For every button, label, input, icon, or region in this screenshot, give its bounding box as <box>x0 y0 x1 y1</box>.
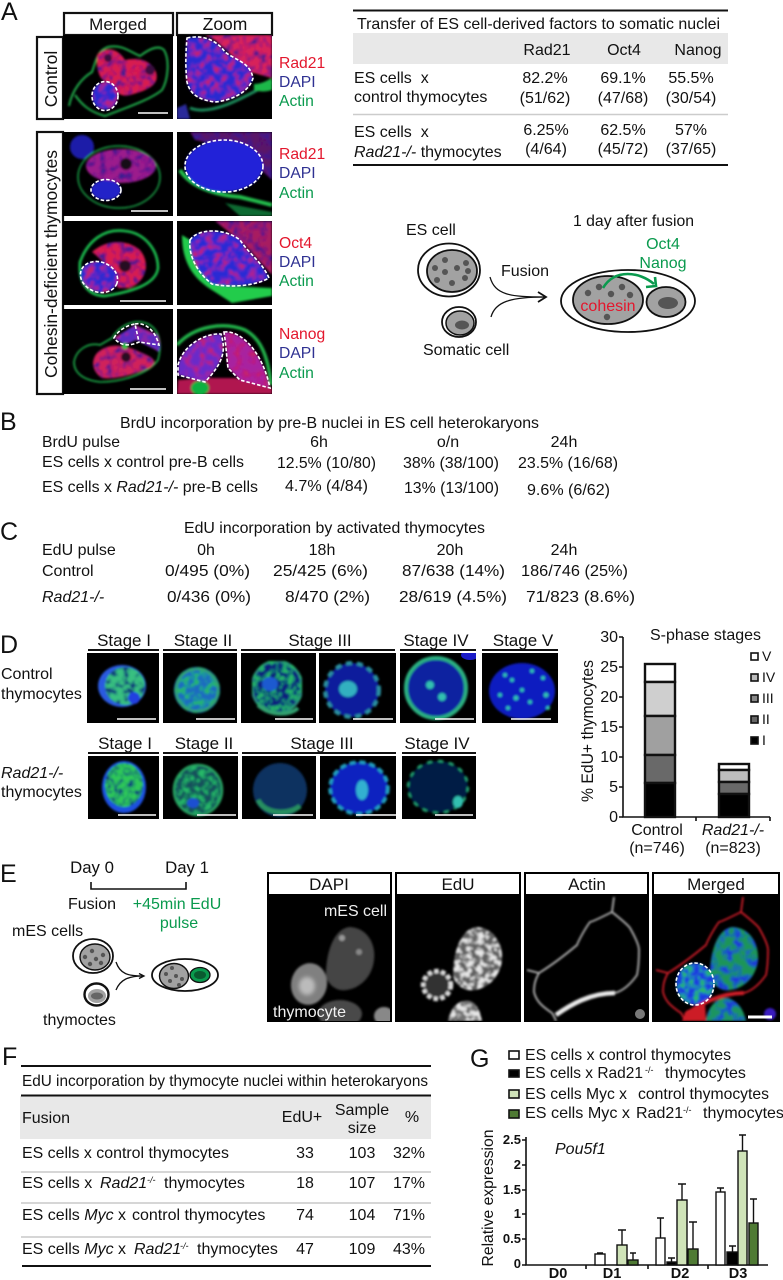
label: Oct4 Nanog <box>639 236 687 272</box>
x tick labels <box>549 1266 747 1280</box>
table row: control thymocytes: (30/54) <box>666 90 716 107</box>
legend: Rad21 DAPI Actin (deficient): Rad21 <box>279 146 325 163</box>
micrograph: Nanog zoom <box>177 309 272 394</box>
row: control: 186/746 (25%) <box>521 563 628 580</box>
legend: Nanog DAPI Actin: Nanog <box>279 326 325 343</box>
legend text: ES cells x control thymocytes <box>525 1047 731 1064</box>
row 3 <box>22 1207 425 1224</box>
panel A: fusion schematic <box>406 213 695 359</box>
header row: EdU+ <box>282 1109 322 1126</box>
micrograph: Rad21 stage II <box>163 756 238 819</box>
row: control <box>42 563 628 580</box>
label: ES cell: ES cell <box>406 222 456 239</box>
micrograph: Rad21 stage III a <box>242 756 316 819</box>
stage headers control: Stage I <box>97 631 151 650</box>
table row: Rad21 thymocytes: (45/72) <box>598 141 648 158</box>
chart title: S-phase stages <box>650 627 761 644</box>
table rules and header band <box>353 10 728 165</box>
row label: Cohesin-deficient thymocytes: Cohesin-deficient thymocytes <box>41 150 61 378</box>
stage legend: II <box>762 711 770 727</box>
row: control pre-B: 23.5% (16/68) <box>518 455 618 472</box>
column header: Merged: Merged <box>89 15 147 34</box>
header row <box>42 434 577 451</box>
table row: control thymocytes: control thymocytes <box>354 89 487 106</box>
panel letter G: G <box>470 1045 489 1073</box>
table header row: Nanog <box>674 42 722 59</box>
header row: Sample <box>335 1102 389 1119</box>
header row <box>42 542 577 559</box>
row: Rad21 pre-B: 9.6% (6/62) <box>527 482 610 499</box>
legend text: ES cells x Rad21 <box>525 1065 643 1082</box>
row: Rad21 pre-B: ES cells x Rad21-/- pre-B cells <box>42 479 258 496</box>
row label: control thymocytes <box>1 666 82 703</box>
stage legend: V <box>762 648 772 664</box>
header row: 24h <box>551 542 577 559</box>
row: control: 0/495 (0%) <box>165 563 250 580</box>
table rules and band <box>20 1066 431 1266</box>
gene label: Pou5f1 <box>555 1141 606 1158</box>
legend text: Rad21 <box>636 1105 683 1122</box>
micrograph: Actin: Actin <box>568 875 606 894</box>
legend text: ES cells Myc x <box>525 1105 630 1122</box>
y tick labels: 5 <box>609 779 618 796</box>
legend: Oct4 DAPI Actin: Oct4 <box>279 235 312 252</box>
row: control: 87/638 (14%) <box>402 563 505 580</box>
y tick labels: 0 <box>514 1256 521 1271</box>
micrograph: control stage II <box>163 653 237 723</box>
legend: Oct4 DAPI Actin: DAPI <box>279 254 316 271</box>
table row: Rad21 thymocytes: (37/65) <box>666 141 716 158</box>
legend: Rad21 DAPI Actin (control): Actin <box>279 93 314 110</box>
micrograph: Oct4 zoom <box>177 221 272 305</box>
row 3: ES cells Myc x <box>22 1207 126 1224</box>
table row: control thymocytes: (47/68) <box>598 90 648 107</box>
row 1: 33 <box>296 1145 314 1162</box>
legend text: -/- <box>645 1065 654 1075</box>
y tick labels: 10 <box>600 749 618 766</box>
header row: EdU pulse <box>42 542 116 559</box>
timeline: +45min EdU <box>133 896 221 913</box>
legend text: -/- <box>683 1105 692 1115</box>
bar category labels: Control <box>631 822 683 839</box>
bar category labels: (n=746) <box>629 840 685 857</box>
row label: Control <box>37 37 63 119</box>
stage headers control: Stage II <box>174 631 232 650</box>
header row: o/n <box>437 434 459 451</box>
row 1: 32% <box>393 1145 425 1162</box>
table row: Rad21 thymocytes <box>354 122 716 161</box>
label: thymoctes: thymoctes <box>43 1012 116 1029</box>
row 2: thymocytes <box>164 1175 245 1192</box>
legend text: thymocytes <box>703 1105 783 1122</box>
row 4: Rad21 <box>134 1241 181 1258</box>
label: Oct4 Nanog: Nanog <box>639 255 687 272</box>
table row: control thymocytes: (51/62) <box>520 90 570 107</box>
row label: control thymocytes: Control <box>1 666 53 683</box>
stage headers Rad21 <box>88 734 476 753</box>
axes <box>619 637 770 821</box>
table header row: Rad21 <box>523 42 571 59</box>
header row: BrdU pulse <box>42 434 120 451</box>
row 2 <box>22 1175 425 1192</box>
panel letter B: B <box>0 408 17 436</box>
panel letter F: F <box>2 1043 17 1071</box>
micrograph: control stage I <box>87 653 159 723</box>
row label: Rad21 thymocytes <box>1 765 82 801</box>
y tick labels <box>600 629 618 826</box>
y axis label: % EdU+ thymocytes <box>579 660 597 802</box>
table title: BrdU incorporation by pre-B nuclei in ES cell heterokaryons <box>120 415 539 432</box>
y tick labels: 1.5 <box>503 1182 521 1197</box>
legend: Rad21 DAPI Actin (control): Rad21 <box>279 55 325 72</box>
legend: Rad21 DAPI Actin (control) <box>279 55 325 110</box>
icon: mES cell <box>73 939 113 973</box>
row 3: 71% <box>393 1207 425 1224</box>
row label: Rad21 thymocytes: Rad21-/- <box>1 765 63 782</box>
header row: 0h <box>197 542 215 559</box>
arrow: green factor transfer <box>603 274 656 288</box>
stage headers Rad21: Stage III <box>290 734 354 753</box>
label: cohesin: cohesin <box>580 298 636 315</box>
micrograph: control stage V <box>482 653 558 723</box>
y tick labels: 15 <box>600 719 618 736</box>
icon: thymocyte <box>84 984 108 1006</box>
row: Rad21: 0/436 (0%) <box>167 589 251 606</box>
row label: Control: Control <box>41 51 61 107</box>
stage legend <box>751 648 776 748</box>
timeline: Day 1 <box>165 858 209 877</box>
table row: Rad21 thymocytes: Rad21-/- thymocytes <box>354 144 502 161</box>
micrograph: control stage III a <box>241 653 316 723</box>
label: mES cells: mES cells <box>12 923 83 940</box>
row: control pre-B: 12.5% (10/80) <box>277 455 376 472</box>
stage legend: III <box>762 690 774 706</box>
table title: Transfer of ES cell-derived factors to somatic nuclei <box>357 16 720 33</box>
micrograph: DAPI: thymocyte <box>273 1004 346 1021</box>
row 2: -/- <box>147 1175 156 1185</box>
bars <box>595 1151 758 1265</box>
micrograph: Actin <box>524 872 649 1022</box>
micrograph: Oct4 merged <box>63 221 173 305</box>
legend <box>509 1051 519 1118</box>
row: Rad21 pre-B: 13% (13/100) <box>404 480 499 497</box>
row: control: 25/425 (6%) <box>273 563 368 580</box>
micrograph: Nanog merged <box>63 309 173 394</box>
legend: Rad21 DAPI Actin (control): DAPI <box>279 74 316 91</box>
timeline: Day 0 <box>70 858 114 877</box>
label: Fusion: Fusion <box>501 263 549 280</box>
panel A: transfer table <box>353 10 728 165</box>
micrograph: Rad21 stage I <box>88 756 159 819</box>
stage headers control: Stage V <box>493 631 554 650</box>
legend: Rad21 DAPI Actin (deficient): DAPI <box>279 165 316 182</box>
timeline: Fusion <box>68 896 116 913</box>
column header: Zoom <box>177 13 272 35</box>
table row: control thymocytes <box>354 70 716 107</box>
row 4: 47 <box>296 1241 314 1258</box>
legend text: ES cells Myc x <box>525 1086 627 1103</box>
header row <box>22 1102 419 1137</box>
row 1 <box>22 1145 425 1162</box>
legend text: control thymocytes <box>638 1086 769 1103</box>
table row: control thymocytes: 69.1% <box>600 70 646 87</box>
row 4: thymocytes <box>197 1241 278 1258</box>
row 1: ES cells x control thymocytes <box>22 1145 229 1162</box>
row label: Rad21 thymocytes: thymocytes <box>1 784 82 801</box>
row: Rad21: 28/619 (4.5%) <box>399 589 507 606</box>
row 4: 109 <box>349 1241 375 1258</box>
table row: Rad21 thymocytes: 62.5% <box>600 122 646 139</box>
row: control: Control <box>42 563 94 580</box>
row: Rad21 pre-B <box>42 478 610 499</box>
table row: Rad21 thymocytes: ES cells x <box>354 124 429 141</box>
row: Rad21 <box>42 589 635 606</box>
micrograph: Merged <box>652 872 780 1022</box>
row: Rad21: 71/823 (8.6%) <box>526 589 635 606</box>
micrograph: EdU: EdU <box>441 875 475 894</box>
stage legend: IV <box>762 669 776 685</box>
y tick labels: 0 <box>609 809 618 826</box>
panel E: micrographs <box>267 872 780 1028</box>
legend text <box>525 1047 783 1122</box>
y tick labels: 0.5 <box>503 1231 521 1246</box>
stage legend: I <box>762 732 766 748</box>
micrograph: Rad21 zoom <box>177 132 272 216</box>
header row: 6h <box>310 434 328 451</box>
panel letter E: E <box>0 860 17 888</box>
y axis label: Relative expression <box>480 1130 497 1266</box>
stage headers Rad21: Stage II <box>175 734 233 753</box>
header row: % <box>405 1109 419 1126</box>
table row: Rad21 thymocytes: (4/64) <box>525 141 567 158</box>
table title: EdU incorporation by activated thymocytes <box>184 520 485 537</box>
row label: control thymocytes: thymocytes <box>1 686 82 703</box>
y tick labels: 2.5 <box>503 1132 521 1147</box>
panel C: EdU table <box>0 518 635 606</box>
arrow: fusion <box>490 277 546 317</box>
icon: heterokaryon <box>561 270 695 332</box>
row: control pre-B: 38% (38/100) <box>403 455 499 472</box>
header row: size <box>348 1120 376 1137</box>
y tick labels: 1 <box>514 1206 521 1221</box>
legend: Nanog DAPI Actin <box>279 326 325 382</box>
table header row <box>523 42 722 59</box>
micrograph: control merged <box>63 35 173 119</box>
header row: 18h <box>309 542 335 559</box>
bar category labels: (n=823) <box>705 840 761 857</box>
y tick labels: 2 <box>514 1157 521 1172</box>
header row: Fusion <box>22 1110 70 1127</box>
legend: Nanog DAPI Actin: DAPI <box>279 345 316 362</box>
stage headers Rad21: Stage IV <box>404 734 470 753</box>
header row: 24h <box>551 434 577 451</box>
row: Rad21: 8/470 (2%) <box>285 589 370 606</box>
stage headers control: Stage III <box>288 631 352 650</box>
legend text: thymocytes <box>665 1065 746 1082</box>
error bars <box>597 1135 757 1262</box>
stain legend rows <box>279 55 325 382</box>
micrograph: Merged: Merged <box>687 875 745 894</box>
row: Rad21: Rad21-/- <box>42 589 104 606</box>
panel G: expression chart <box>470 1045 783 1280</box>
axes <box>522 1137 768 1269</box>
legend: Rad21 DAPI Actin (deficient) <box>279 146 325 202</box>
bar: Rad21 <box>719 764 749 817</box>
bar category labels: Rad21-/- <box>702 822 764 839</box>
table row: control thymocytes: ES cells x <box>354 70 429 87</box>
row: Rad21 pre-B: 4.7% (4/84) <box>285 478 368 495</box>
row 4 <box>22 1241 425 1258</box>
icon: somatic cell <box>442 307 476 337</box>
y tick labels: 20 <box>600 689 618 706</box>
micrograph: EdU <box>395 872 521 1022</box>
panel A: microscopy grid <box>1 0 325 395</box>
row 3: 74 <box>296 1207 314 1224</box>
micrograph: Rad21 stage IV <box>402 756 476 819</box>
arrow: fusion <box>116 962 144 990</box>
micrograph: Rad21 stage III b <box>320 756 396 819</box>
row 3: control thymocytes <box>132 1207 265 1224</box>
micrograph: DAPI <box>267 872 394 1028</box>
micrograph: DAPI: DAPI <box>309 875 349 894</box>
icon: heterokaryon <box>152 959 218 991</box>
column header: Zoom: Zoom <box>203 14 247 34</box>
y tick labels <box>503 1132 521 1271</box>
legend: Nanog DAPI Actin: Actin <box>279 365 314 382</box>
legend: Oct4 DAPI Actin: Actin <box>279 273 314 290</box>
label: Oct4 Nanog: Oct4 <box>646 236 680 253</box>
label: 1 day after fusion: 1 day after fusion <box>573 213 694 230</box>
panel letter D: D <box>0 631 18 659</box>
micrograph: control stage III b <box>319 653 396 723</box>
bar: control <box>645 664 675 817</box>
row 1: 103 <box>349 1145 375 1162</box>
table header row: Oct4 <box>607 42 641 59</box>
column header: Merged <box>64 13 173 35</box>
panel D: stacked bar chart <box>579 627 776 857</box>
row: control pre-B <box>42 454 618 472</box>
row 2: ES cells x <box>22 1175 92 1192</box>
label: Somatic cell: Somatic cell <box>423 342 509 359</box>
panel D: S-phase micrographs <box>0 631 558 819</box>
row 4: ES cells Myc x <box>22 1241 126 1258</box>
y tick labels: 30 <box>600 629 618 646</box>
table row: control thymocytes: 82.2% <box>522 70 568 87</box>
table row: Rad21 thymocytes: 57% <box>675 122 707 139</box>
stage headers Rad21: Stage I <box>98 734 152 753</box>
row 4: -/- <box>180 1241 188 1251</box>
panel E: timeline and schematic <box>0 858 221 1029</box>
micrograph: Rad21 merged <box>63 132 173 216</box>
row 2: 18 <box>296 1175 314 1192</box>
icon: ES cell <box>418 244 480 296</box>
table row: Rad21 thymocytes: 6.25% <box>523 122 569 139</box>
table title: EdU incorporation by thymocyte nuclei within heterokaryons <box>22 1073 428 1090</box>
row 3: 104 <box>349 1207 375 1224</box>
panel B: BrdU table <box>0 408 618 499</box>
table row: control thymocytes: 55.5% <box>668 70 714 87</box>
panel letter C: C <box>0 518 18 546</box>
header row: 20h <box>437 542 463 559</box>
micrograph: DAPI: mES cell <box>324 903 387 920</box>
row 4: 43% <box>393 1241 425 1258</box>
panel F: EdU table <box>2 1043 431 1266</box>
timeline <box>68 858 221 932</box>
stage headers control <box>88 631 558 650</box>
row label: Cohesin-deficient thymocytes <box>37 132 63 394</box>
micrograph: control stage IV <box>400 653 476 723</box>
row 2: Rad21 <box>100 1175 147 1192</box>
micrograph: control zoom <box>177 35 272 119</box>
timeline: pulse <box>160 915 198 932</box>
legend: Oct4 DAPI Actin <box>279 235 316 290</box>
legend: Rad21 DAPI Actin (deficient): Actin <box>279 185 314 202</box>
row 2: 107 <box>349 1175 375 1192</box>
stage headers control: Stage IV <box>403 631 469 650</box>
row: control pre-B: ES cells x control pre-B cells <box>42 454 244 471</box>
row 2: 17% <box>393 1175 425 1192</box>
bar category labels <box>629 822 764 857</box>
y tick labels: 25 <box>600 659 618 676</box>
